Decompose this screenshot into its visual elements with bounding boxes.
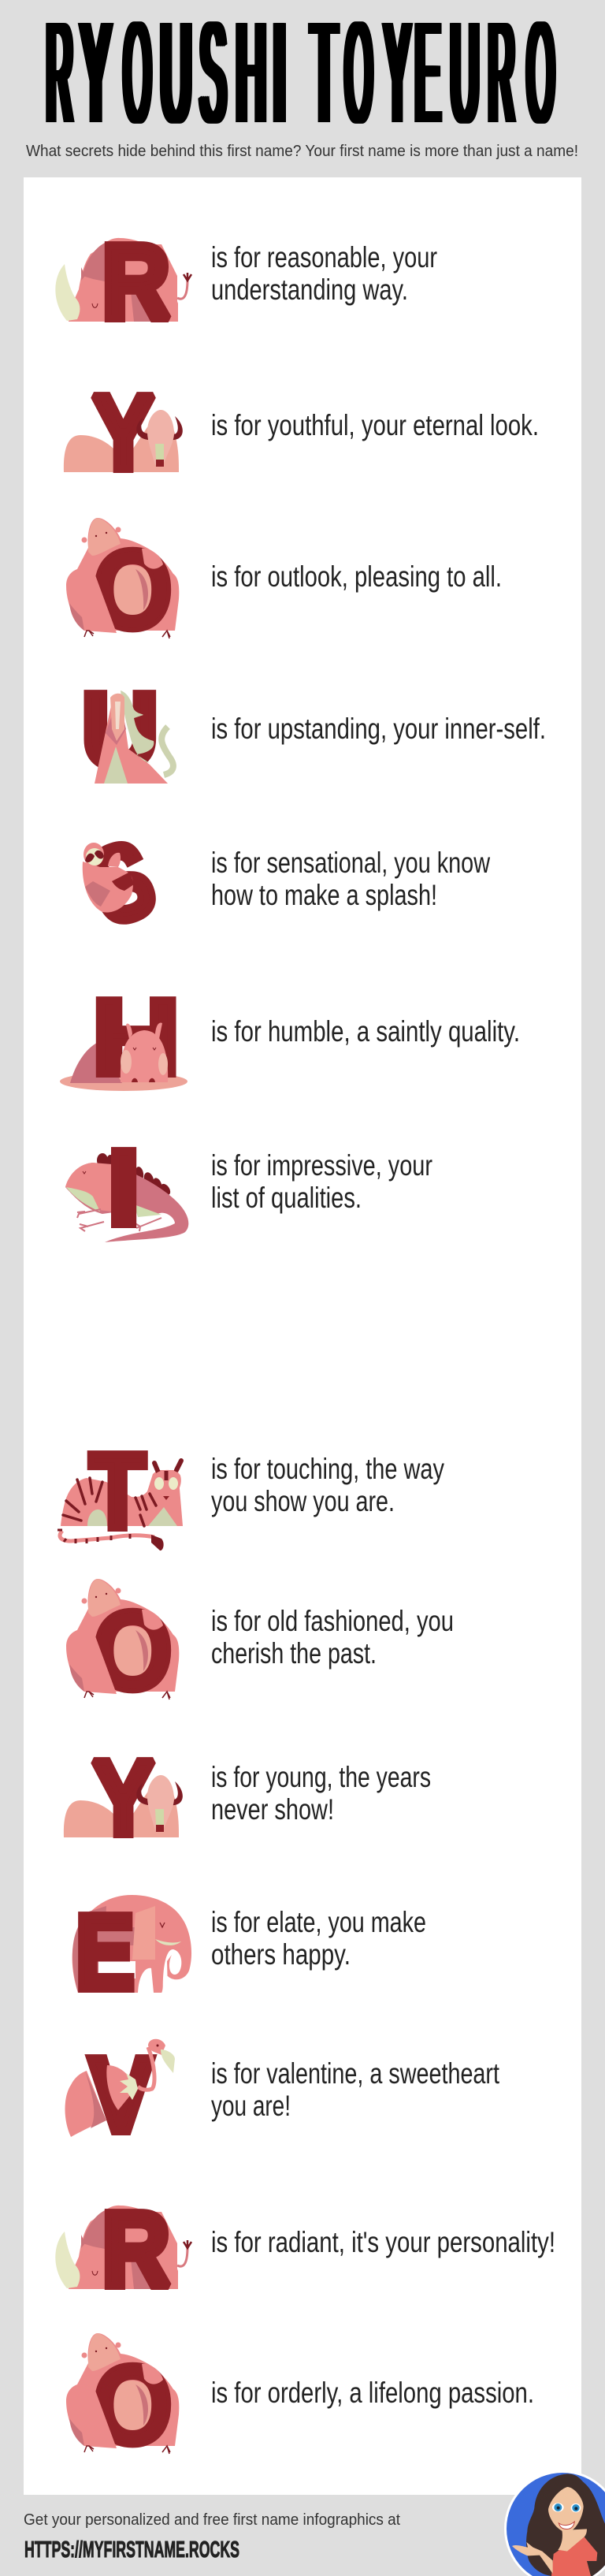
icon: R rhino <box>55 222 191 341</box>
row 8: T tiger: you show you are. <box>211 1485 395 1517</box>
icon: Y yak: Y <box>92 1738 154 1857</box>
row 8: T tiger <box>58 1431 444 1550</box>
icon: Y yak <box>64 373 183 492</box>
icon: H creature: H <box>92 977 180 1096</box>
icon: R rhino <box>55 2190 191 2309</box>
icon: Y yak <box>64 1738 183 1857</box>
row 7: I iguana: list of qualities. <box>211 1182 362 1214</box>
row 12: V flamingo: you are! <box>211 2090 291 2122</box>
row 14: O gorilla <box>66 2333 534 2469</box>
icon: I iguana: I <box>108 1128 140 1247</box>
row 9: O gorilla: cherish the past. <box>211 1637 377 1670</box>
row 3: O gorilla <box>66 518 502 653</box>
row 9: O gorilla <box>66 1579 454 1714</box>
avatar <box>504 2470 605 2576</box>
icon: E elephant <box>72 1893 191 2012</box>
icon: E elephant: E <box>76 1893 135 2012</box>
row 11: E elephant <box>72 1893 426 2012</box>
icon: V flamingo: V <box>89 2035 153 2154</box>
icon: S sloth: S <box>77 817 168 948</box>
row 2: Y yak <box>64 373 539 492</box>
icon: U unicorn: U <box>81 671 158 790</box>
text: O line: is for old fashioned, you <box>211 1605 454 1637</box>
icon: T tiger <box>58 1431 183 1550</box>
icon: Y yak: Y <box>92 373 154 492</box>
text: E line: is for elate, you make <box>211 1906 426 1938</box>
icon: V flamingo <box>65 2035 175 2154</box>
row 10: Y yak: never show! <box>211 1793 334 1826</box>
text: S line: is for sensational, you know <box>211 847 490 879</box>
text: V line: is for valentine, a sweetheart <box>211 2057 500 2090</box>
icon: T tiger: T <box>90 1431 146 1550</box>
text: Y line: is for young, the years <box>211 1761 431 1793</box>
row 13: R rhino <box>55 2190 555 2309</box>
subtitle: What secrets hide behind this first name? Your first name is more than just a name! <box>26 143 578 160</box>
text: O line: is for outlook, pleasing to all. <box>211 560 502 593</box>
icon: I iguana <box>65 1128 188 1247</box>
icon: O gorilla: O <box>92 2341 173 2469</box>
row 12: V flamingo <box>65 2035 500 2154</box>
text: R line: is for reasonable, your <box>211 241 437 274</box>
text: H line: is for humble, a saintly quality. <box>211 1015 520 1048</box>
footer url: HTTPS://MYFIRSTNAME.ROCKS <box>24 2537 239 2563</box>
row 10: Y yak <box>64 1738 431 1857</box>
row 7: I iguana <box>65 1128 432 1247</box>
row 11: E elephant: others happy. <box>211 1938 351 1971</box>
row 1: R rhino: understanding way. <box>211 274 408 306</box>
icon: R rhino: R <box>102 2190 170 2309</box>
icon: H creature <box>60 977 187 1096</box>
text: T line: is for touching, the way <box>211 1453 444 1485</box>
icon: O gorilla: O <box>92 1587 173 1714</box>
footer text: Get your personalized and free first name infographics at <box>24 2511 400 2529</box>
row 5: S sloth <box>77 817 490 948</box>
row 5: S sloth: how to make a splash! <box>211 879 437 911</box>
text: I line: is for impressive, your <box>211 1149 432 1182</box>
title <box>46 0 556 153</box>
row 6: H humble creature <box>60 977 520 1096</box>
icon: R rhino: R <box>102 222 170 341</box>
row 1: R rhino <box>55 222 437 341</box>
icon: O gorilla: O <box>92 526 173 653</box>
row 4: U unicorn <box>81 671 546 790</box>
